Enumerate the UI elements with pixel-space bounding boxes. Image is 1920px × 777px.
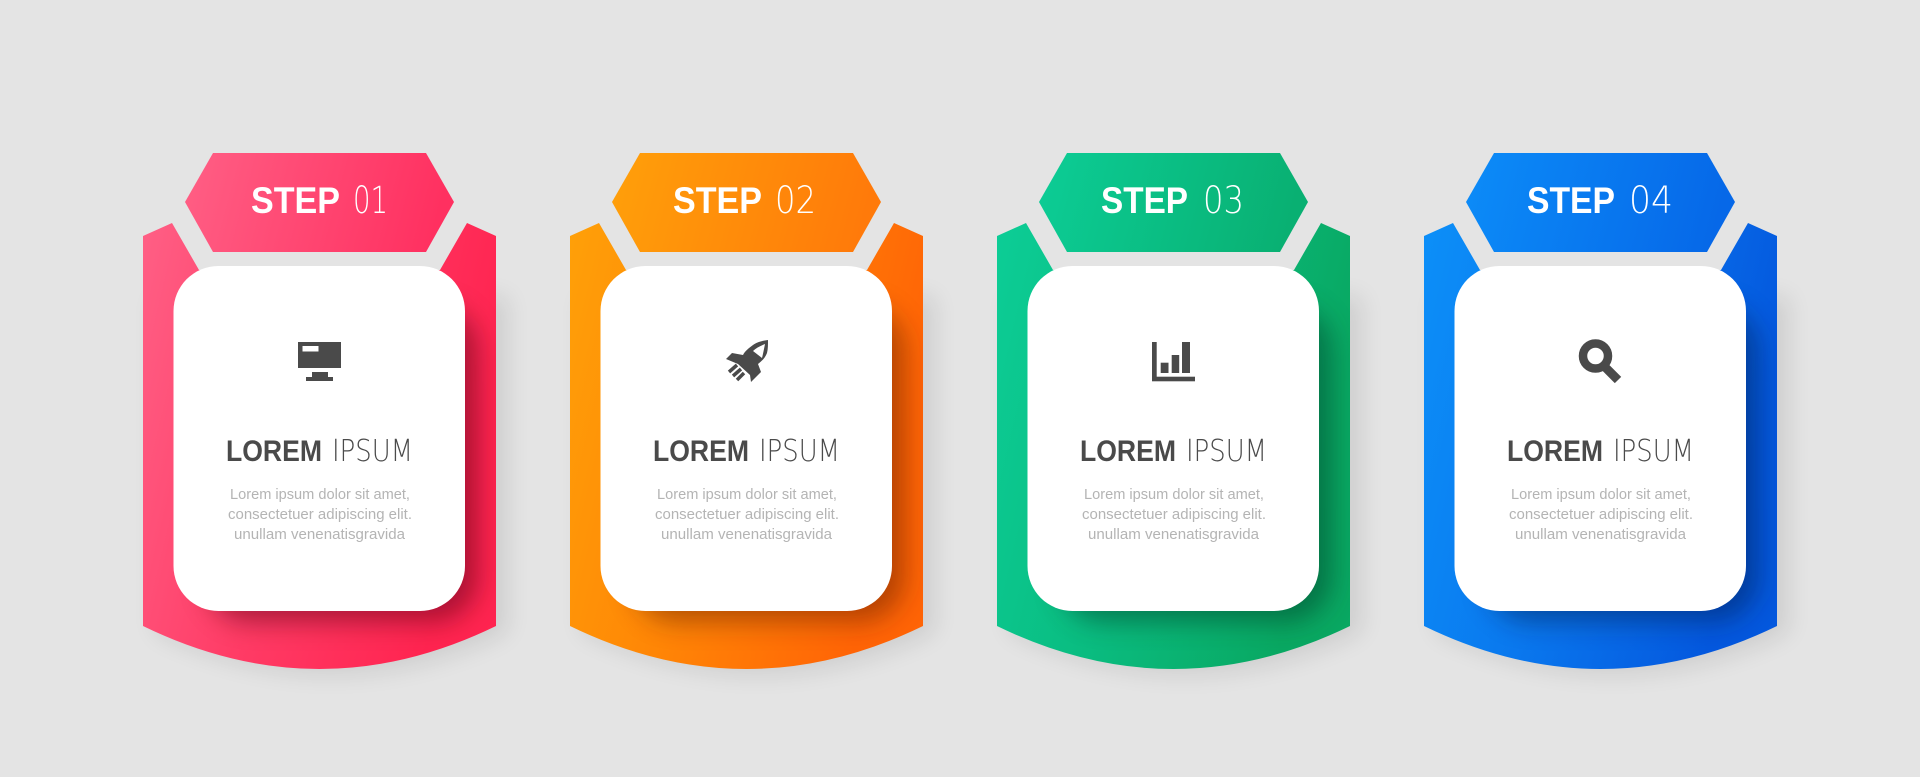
step 01 title: IPSUM <box>332 434 413 469</box>
outer shape shadow <box>1009 296 1362 675</box>
panel: step 01 <box>143 153 508 675</box>
panel: step 04 <box>1424 153 1789 675</box>
step 01 heading: STEP <box>251 180 340 221</box>
step 01 coloured frame <box>143 223 496 669</box>
step 02 body text: consectetuer adipiscing elit. <box>655 506 839 523</box>
step 04 title: LOREM <box>1507 435 1603 468</box>
step 02 title: LOREM <box>653 435 749 468</box>
step 01 card shadow <box>205 305 478 622</box>
step 03 body text: consectetuer adipiscing elit. <box>1082 506 1266 523</box>
step 03 heading: STEP <box>1101 180 1188 221</box>
outer shape shadow <box>1436 296 1789 675</box>
step 04 hexagon <box>1466 153 1735 252</box>
step 03 hexagon <box>1039 153 1308 252</box>
step 02 coloured frame <box>570 223 923 669</box>
step 04 body text <box>1509 486 1693 543</box>
step 01 body text: consectetuer adipiscing elit. <box>228 506 412 523</box>
icon: monitor <box>298 342 341 381</box>
step 02 hexagon <box>612 153 881 252</box>
step 02 title: IPSUM <box>759 434 840 469</box>
panel: step 03 <box>997 153 1362 675</box>
step 04 white card <box>1454 266 1746 611</box>
outer shape shadow <box>582 296 935 675</box>
icon: magnifier <box>1583 344 1618 380</box>
step 03 card shadow <box>1059 305 1332 622</box>
step 03 body text: unullam venenatisgravida <box>1088 526 1260 543</box>
icon: bar chart <box>1152 342 1195 381</box>
step 03 body text: Lorem ipsum dolor sit amet, <box>1084 486 1264 503</box>
step 04 heading: 04 <box>1629 179 1673 222</box>
step 03 title: IPSUM <box>1186 434 1267 469</box>
step 01 hexagon <box>185 153 454 252</box>
step 03 title: LOREM <box>1080 435 1176 468</box>
step 04 body text: Lorem ipsum dolor sit amet, <box>1511 486 1691 503</box>
step 04 title: IPSUM <box>1613 434 1694 469</box>
step 04 heading: STEP <box>1527 180 1615 221</box>
step 01 body text: Lorem ipsum dolor sit amet, <box>230 486 410 503</box>
step 02 body text: Lorem ipsum dolor sit amet, <box>657 486 837 503</box>
step 02 card shadow <box>632 305 905 622</box>
step 04 body text: consectetuer adipiscing elit. <box>1509 506 1693 523</box>
step 01 heading: 01 <box>353 179 388 222</box>
icon: rocket <box>726 340 768 382</box>
step 02 body text: unullam venenatisgravida <box>661 526 833 543</box>
step 03 body text <box>1082 486 1266 543</box>
step 03 coloured frame <box>997 223 1350 669</box>
step 04 coloured frame <box>1424 223 1777 669</box>
step 01 body text: unullam venenatisgravida <box>234 526 406 543</box>
step 03 heading: 03 <box>1203 179 1244 222</box>
step 01 title: LOREM <box>226 435 322 468</box>
outer shape shadow <box>155 296 508 675</box>
step 04 card shadow <box>1486 305 1759 622</box>
step 03 white card <box>1028 266 1319 611</box>
step 04 body text: unullam venenatisgravida <box>1515 526 1687 543</box>
step 01 white card <box>174 266 465 611</box>
step 02 heading: 02 <box>775 179 816 222</box>
step 02 white card <box>600 266 892 611</box>
step 02 body text <box>655 486 839 543</box>
step 02 heading: STEP <box>673 180 762 221</box>
step 01 body text <box>228 486 412 543</box>
panel: step 02 <box>570 153 935 675</box>
